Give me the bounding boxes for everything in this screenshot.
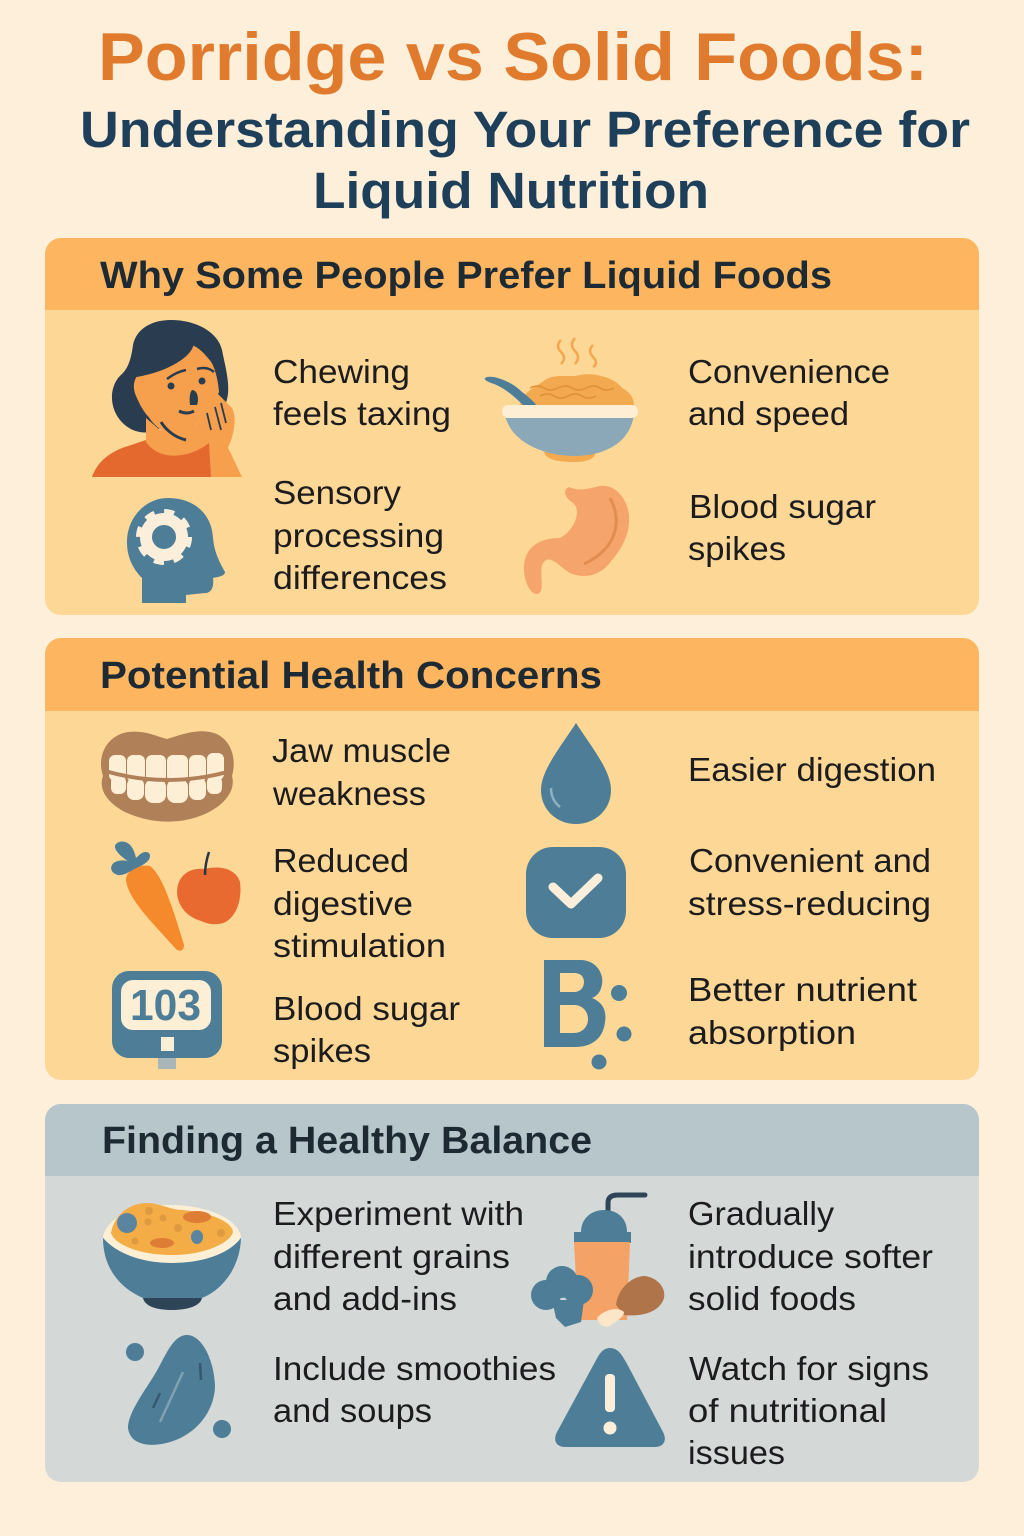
heading: balance: Finding a Healthy Balance [102,1120,592,1162]
text: chewing: Chewing [273,353,410,390]
text: convenience: Convenience [688,353,890,390]
text: blood sugar spikes: spikes [273,1032,371,1069]
text: better nutrient: Better nutrient [688,971,917,1008]
text: convenient: Convenient and [689,842,931,879]
text: gradually: introduce softer [688,1238,933,1275]
text: experiment [273,1195,524,1317]
icon: stomach [524,486,629,594]
text: watch: Watch for signs [689,1350,929,1387]
text: watch: issues [688,1434,785,1471]
icon: head with gear [127,498,225,603]
icon: smoothie with broccoli and chicken [531,1195,664,1327]
text: convenient: stress-reducing [688,885,931,922]
icon: warning triangle [555,1348,665,1447]
text: jaw [272,732,451,812]
text: blood sugar spikes: Blood sugar [273,990,460,1027]
title: Understanding Your Preference for [80,101,970,158]
text: jaw: weakness [272,775,426,812]
heading: why: Why Some People Prefer Liquid Foods [100,255,832,297]
text: sensory: Sensory [273,474,402,511]
text: experiment: different grains [273,1238,510,1275]
text: reduced: stimulation [273,927,446,964]
title [80,19,970,219]
title: Liquid Nutrition [313,162,709,219]
text: sensory [273,474,447,596]
text: reduced: Reduced [273,842,409,879]
icon: glucose meter: 103 [130,981,201,1030]
text: experiment: Experiment with [273,1195,524,1232]
text: blood sugar [688,488,876,567]
text: chewing: feels taxing [273,395,451,432]
text: experiment: and add-ins [273,1280,457,1317]
text: blood sugar: spikes [688,530,786,567]
heading: concerns: Potential Health Concerns [100,655,602,697]
text: chewing [273,353,451,432]
text: include smoothies: Include smoothies [273,1350,556,1387]
text: gradually: Gradually [688,1195,835,1232]
icon: teeth [101,731,234,822]
text: include smoothies [273,1350,556,1429]
text: blood sugar: Blood sugar [689,488,876,525]
icon: carrot and apple [111,842,240,951]
text: jaw: Jaw muscle [272,732,451,769]
panel: potential health concerns [45,638,979,1080]
text: blood sugar spikes [273,990,460,1069]
text: reduced: digestive [273,885,413,922]
text: include smoothies: and soups [273,1392,432,1429]
text: convenient [688,842,931,922]
text: reduced [273,842,446,964]
text: sensory: processing [273,517,444,554]
text: watch [688,1350,929,1471]
icon: woman touching jaw [92,320,242,477]
icon: vitamin B [544,960,632,1070]
text: gradually: solid foods [688,1280,856,1317]
text: better nutrient: absorption [688,1014,856,1051]
text: better nutrient [688,971,917,1051]
title: Porridge vs Solid Foods: [98,19,928,95]
text: sensory: differences [273,559,447,596]
icon: grain bowl [103,1203,241,1310]
panel: finding a healthy balance [45,1104,979,1482]
text: convenience [688,353,890,432]
text: gradually [688,1195,933,1317]
text: easier digestion: Easier digestion [688,751,936,788]
text: convenience: and speed [688,395,849,432]
icon: glucose meter [112,971,222,1069]
icon: water drop [541,723,611,824]
icon: check [526,847,626,938]
text: watch: of nutritional [688,1392,887,1429]
icon: porridge bowl [485,338,638,462]
panel: why some people prefer liquid foods [45,238,979,615]
icon: leaf shape with dots [126,1335,231,1445]
